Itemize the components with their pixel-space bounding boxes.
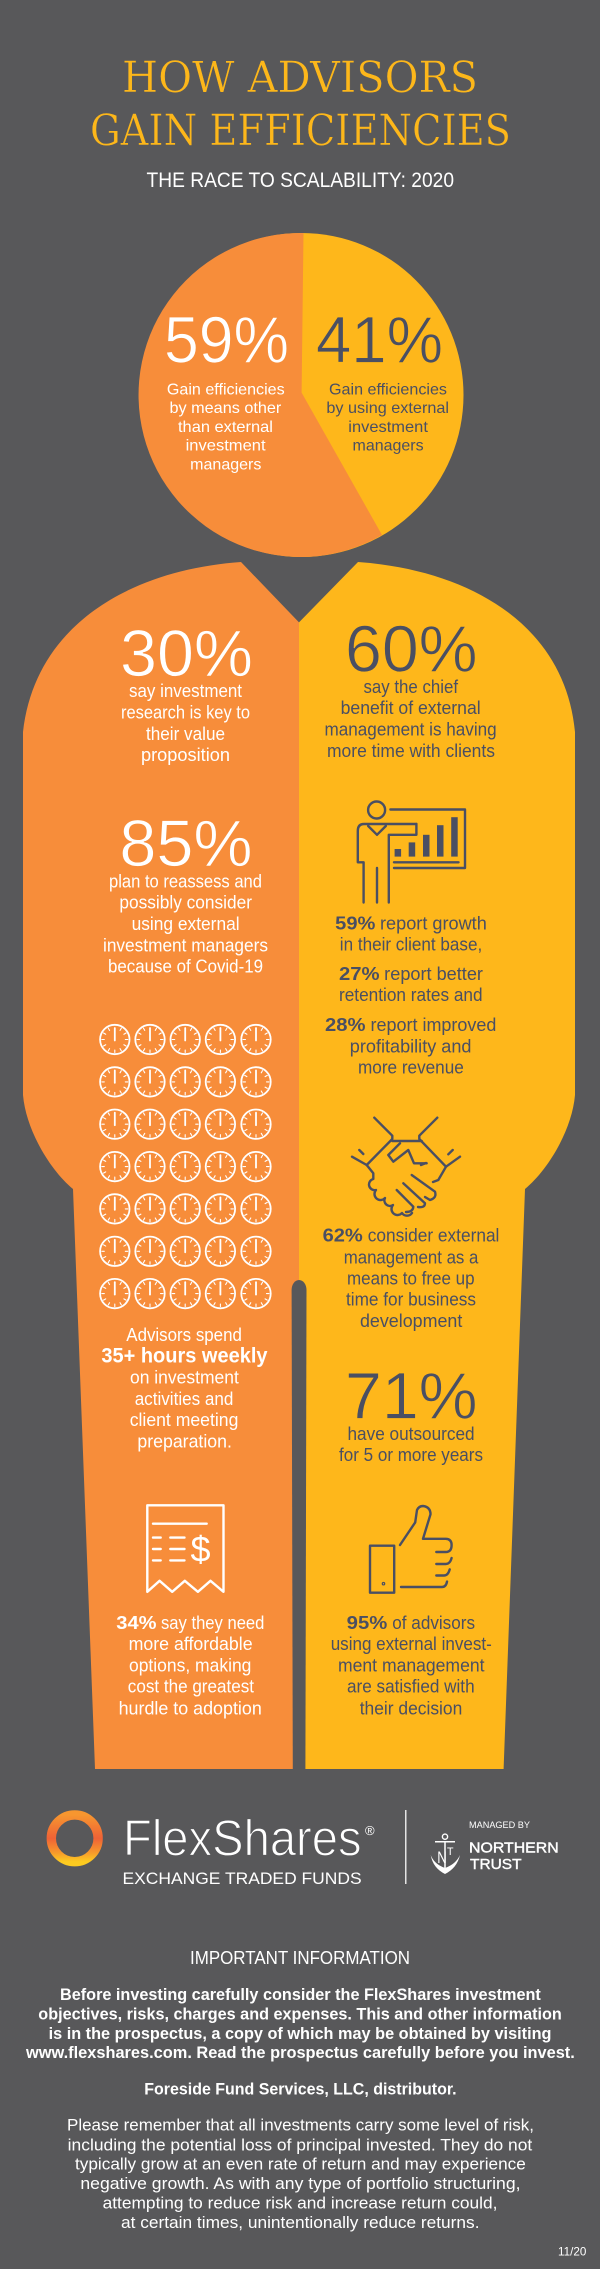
title	[90, 53, 511, 156]
stat: 85%: possibly consider	[119, 893, 252, 913]
stat: 85%: because of Covid-19	[108, 956, 263, 976]
logo: Northern Trust wordmark	[469, 1820, 559, 1873]
stats: client growth, retention, profitability: report better	[384, 964, 483, 984]
text block: prospectus notice: objectives, risks, charges and expenses. This and other information	[38, 2005, 562, 2023]
stat: 95%: their decision	[360, 1698, 462, 1718]
stat: 35+ hours weekly: preparation.	[137, 1431, 232, 1451]
stat: 60%: say the chief	[364, 677, 459, 697]
stat: 62%: development	[360, 1311, 462, 1331]
icon: thumbs up	[370, 1506, 452, 1593]
stat: 62%: means to free up	[347, 1268, 475, 1288]
body left half	[23, 562, 299, 1769]
pie label: 41%: Gain efficiencies	[329, 381, 447, 398]
gap between legs	[292, 1280, 306, 1771]
stat: 34%: say they need	[161, 1613, 264, 1633]
icon: Northern Trust anchor: N	[437, 1848, 447, 1867]
stat: 60%: more time with clients	[327, 741, 495, 761]
stat: 62%: 62%	[323, 1226, 363, 1246]
stat: 35+ hours weekly	[101, 1325, 268, 1451]
stat: 62%	[323, 1226, 499, 1331]
stat: 60%: benefit of external	[341, 698, 481, 718]
divider between logos	[405, 1810, 406, 1884]
stat: 30%: 30%	[120, 616, 253, 690]
stat: 71%: for 5 or more years	[339, 1445, 483, 1465]
pie label: 59%: by means other	[170, 400, 282, 417]
stats: client growth, retention, profitability: report growth	[380, 913, 487, 933]
stat: 30%: proposition	[141, 745, 230, 765]
stat: 62%: consider external	[368, 1226, 499, 1246]
icon: Northern Trust anchor	[431, 1834, 460, 1874]
stat: 30%: research is key to	[121, 702, 250, 722]
stat: 85%	[103, 806, 268, 976]
stats: client growth, retention, profitability: report improved	[370, 1015, 496, 1035]
logo: Northern Trust wordmark: TRUST	[470, 1857, 522, 1873]
text block: prospectus notice: is in the prospectus, a copy of which may be obtained by visiting	[49, 2025, 551, 2043]
pie label: 41%: by using external	[326, 400, 449, 417]
stat: 60%: management is having	[324, 720, 497, 740]
text block: prospectus notice: Before investing carefully consider the FlexShares investment	[60, 1986, 541, 2004]
logo: FlexShares wordmark: ®	[365, 1823, 375, 1838]
logo: FlexShares ring	[51, 1815, 98, 1862]
text block: risk disclosure: Please remember that all investments carry some level of risk,	[67, 2117, 534, 2135]
stats: client growth, retention, profitability	[325, 913, 496, 1078]
stat: 95%: ment management	[338, 1655, 484, 1675]
body right half	[299, 562, 575, 1769]
icon: Northern Trust anchor: T	[447, 1846, 454, 1858]
stat: 60%	[324, 611, 497, 761]
pie label: 59%	[164, 302, 289, 473]
logo: FlexShares wordmark: EXCHANGE TRADED FUNDS	[122, 1869, 362, 1888]
stat: 71%: 71%	[345, 1358, 478, 1432]
stat: 85%: investment managers	[103, 936, 268, 956]
text block: distributor: Foreside Fund Services, LLC, distributor.	[144, 2080, 457, 2098]
icon: receipt	[147, 1505, 224, 1592]
pie label: 59%: managers	[190, 456, 261, 473]
stats: client growth, retention, profitability: in their client base,	[340, 935, 482, 955]
stat: 60%: 60%	[345, 611, 478, 685]
stat: 95%: 95%	[347, 1613, 387, 1633]
icon: handshake	[352, 1118, 460, 1216]
stat: 35+ hours weekly: client meeting	[130, 1410, 238, 1430]
stat: 85%: 85%	[119, 806, 253, 880]
stat: 95%: of advisors	[392, 1613, 475, 1633]
logo: FlexShares wordmark: FlexShares	[123, 1810, 362, 1866]
pie label: 59%: than external	[178, 419, 273, 436]
pie label: 41%: managers	[352, 438, 424, 455]
pie slice: 41%	[140, 233, 464, 557]
stats: client growth, retention, profitability: more revenue	[358, 1058, 464, 1078]
pie label: 41%: 41%	[316, 302, 443, 376]
stat: 62%: time for business	[346, 1290, 476, 1310]
pie slice: 59%	[139, 233, 382, 557]
text block: risk disclosure: attempting to reduce risk and increase return could,	[103, 2194, 497, 2212]
logo: Northern Trust wordmark: MANAGED BY	[469, 1820, 531, 1831]
stat: 30%: say investment	[129, 681, 242, 701]
pie label: 41%: investment	[348, 419, 428, 436]
text block: risk disclosure	[67, 2117, 534, 2232]
text block: prospectus notice	[25, 1986, 575, 2062]
stat: 34%: options, making	[129, 1655, 251, 1675]
pie label: 59%: Gain efficiencies	[167, 381, 285, 398]
stat: 71%: have outsourced	[348, 1424, 475, 1444]
stat: 35+ hours weekly: on investment	[130, 1368, 239, 1388]
stats: client growth, retention, profitability: retention rates and	[339, 985, 483, 1005]
stats: client growth, retention, profitability: 59%	[335, 913, 375, 933]
stat: 34%	[116, 1613, 264, 1718]
stat: 35+ hours weekly: Advisors spend	[126, 1325, 242, 1345]
text block: risk disclosure: typically grow at an even rate of return and may experience	[75, 2156, 526, 2174]
pie label: 41%	[316, 302, 449, 455]
text block: prospectus notice: www.flexshares.com. Read the prospectus carefully before you invest.	[25, 2044, 575, 2062]
stat: 30%: their value	[146, 724, 225, 744]
stat: 34%: hurdle to adoption	[119, 1698, 262, 1718]
pie chart head	[139, 233, 464, 557]
stat: 34%: cost the greatest	[128, 1677, 254, 1697]
icon: receipt: $	[190, 1528, 211, 1570]
stat: 95%: using external invest-	[331, 1634, 492, 1654]
subtitle: THE RACE TO SCALABILITY: 2020	[146, 169, 454, 192]
stat: 85%: using external	[132, 914, 240, 934]
title: HOW ADVISORS	[122, 53, 478, 103]
stats: client growth, retention, profitability: 28%	[325, 1015, 366, 1035]
logo: Northern Trust wordmark: NORTHERN	[469, 1841, 559, 1857]
text block: risk disclosure: negative growth. As with any type of portfolio structuring,	[80, 2175, 521, 2193]
stat: 30%	[120, 616, 253, 765]
date code: 11/20	[558, 2245, 587, 2259]
stats: client growth, retention, profitability: 27%	[339, 964, 380, 984]
stat: 62%: management as a	[344, 1247, 479, 1267]
stat: 34%: more affordable	[129, 1634, 253, 1654]
stat: 35+ hours weekly: 35+ hours weekly	[101, 1344, 268, 1367]
stats: client growth, retention, profitability: profitability and	[350, 1036, 472, 1056]
text block: risk disclosure: including the potential loss of principal invested. They do not	[68, 2136, 533, 2154]
icon: grid of clocks	[100, 1025, 271, 1308]
stat: 34%: 34%	[116, 1613, 156, 1633]
pie label: 59%: investment	[186, 438, 266, 455]
text block: risk disclosure: at certain times, unintentionally reduce returns.	[121, 2214, 480, 2232]
stat: 85%: plan to reassess and	[109, 872, 262, 892]
title: GAIN EFFICIENCIES	[90, 106, 511, 156]
stat: 35+ hours weekly: activities and	[135, 1389, 233, 1409]
heading: important information: IMPORTANT INFORMATION	[190, 1948, 410, 1968]
stat: 95%: are satisfied with	[347, 1677, 475, 1697]
pie label: 59%: 59%	[164, 302, 289, 376]
stat: 95%	[331, 1613, 492, 1718]
stat: 71%	[339, 1358, 483, 1465]
icon: presenter with bar chart	[358, 802, 465, 902]
